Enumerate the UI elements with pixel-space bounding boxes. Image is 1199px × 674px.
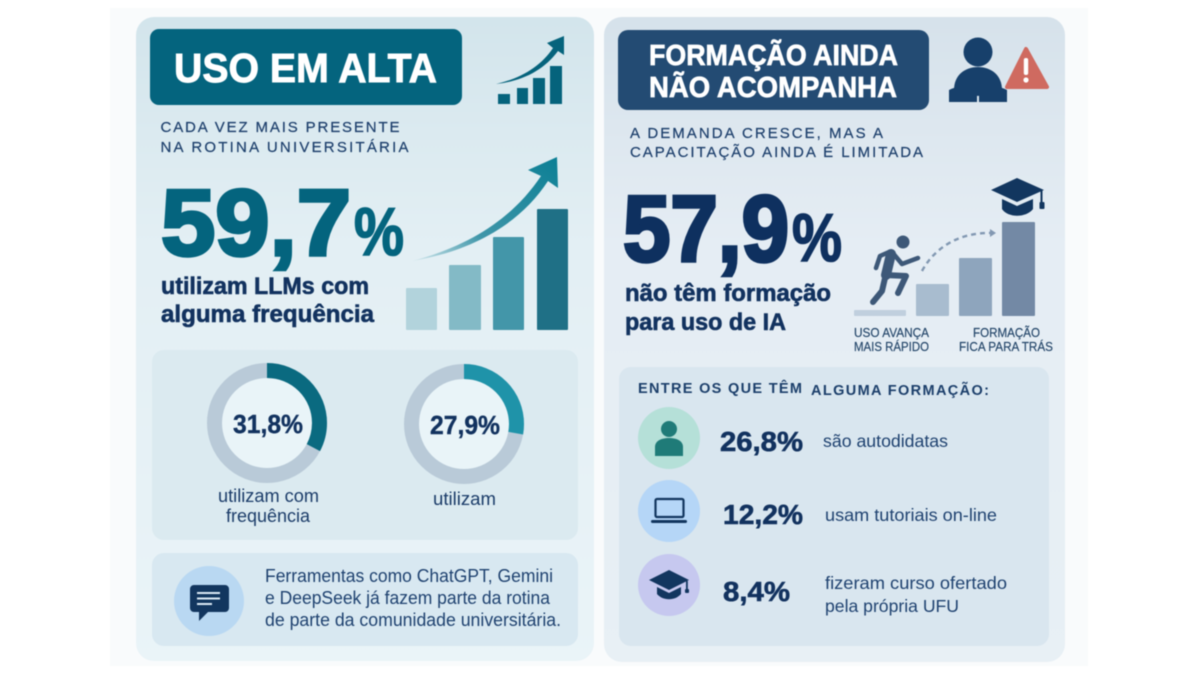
row: autodidatas: são autodidatas: [823, 431, 948, 451]
subtitle: [160, 119, 408, 156]
label: uso avança mais rápido: USO AVANÇA: [854, 326, 930, 340]
label: formação fica para trás: FICA PARA TRÁS: [959, 339, 1053, 354]
subtitle: NA ROTINA UNIVERSITÁRIA: [160, 139, 408, 156]
heading: formação: FORMAÇÃO AINDA: [649, 38, 898, 72]
icon: laptop: [638, 480, 700, 542]
donut: 27,9%: [412, 372, 516, 476]
donut: 31,8%: [214, 370, 320, 476]
donut label: utilizam: utilizam: [433, 489, 496, 509]
label: formação fica para trás: FORMAÇÃO: [973, 326, 1040, 340]
subtitle: A DEMANDA CRESCE, MAS A: [630, 125, 883, 142]
row: curso UFU: 8,4%: [723, 576, 790, 607]
heading: uso em alta: [150, 29, 462, 105]
icon: person: [638, 407, 700, 469]
arrow: growth: [412, 157, 558, 261]
stat description: [161, 273, 375, 328]
donut label: utilizam com frequência: frequência: [226, 506, 311, 526]
big stat: 57,9%: 57,9: [623, 176, 789, 281]
donut label: utilizam com frequência: utilizam com: [218, 486, 319, 506]
stat description: não têm formação: [625, 280, 831, 307]
panel: formação breakdown: [619, 367, 1049, 646]
stat description: [625, 280, 831, 336]
stat description: para uso de IA: [625, 309, 786, 336]
big stat: 57,9%: %: [792, 200, 842, 276]
row: curso UFU: [638, 554, 1007, 616]
icon: chat bubble: [174, 566, 244, 636]
label: uso avança mais rápido: MAIS RÁPIDO: [854, 339, 929, 354]
icon: runner: [873, 236, 918, 302]
heading: uso em alta: USO EM ALTA: [174, 45, 437, 91]
donut: 27,9%: 27,9%: [430, 410, 500, 440]
row: curso UFU: fizeram curso ofertado: [825, 573, 1007, 593]
icon: warning triangle: [1007, 49, 1047, 87]
row: curso UFU: pela própria UFU: [825, 596, 959, 616]
heading: formação: [618, 30, 929, 110]
subtitle: CAPACITAÇÃO AINDA É LIMITADA: [630, 144, 923, 161]
tools text: e DeepSeek já fazem parte da rotina: [265, 588, 551, 608]
row: autodidatas: [638, 407, 948, 469]
icon: cap: [638, 554, 700, 616]
icon: person reading: [949, 38, 1007, 102]
donut label: utilizam com frequência: [218, 486, 319, 526]
tools text: de parte da comunidade universitária.: [265, 610, 561, 630]
row: tutoriais: usam tutoriais on-line: [825, 505, 997, 525]
heading: formação: NÃO ACOMPANHA: [649, 70, 897, 104]
stat description: alguma frequência: [161, 301, 375, 328]
icon: small rising chart: [496, 36, 564, 104]
breakdown heading: ENTRE OS QUE TÊM: [638, 379, 802, 397]
breakdown heading: [638, 379, 989, 399]
panel: donuts: [152, 350, 578, 540]
tools text: [265, 566, 561, 630]
big stat: 59,7%: 59,7: [161, 170, 351, 275]
row: autodidatas: 26,8%: [720, 426, 803, 457]
panel: uso em alta: [136, 17, 594, 661]
label: uso avança mais rápido: [854, 326, 930, 354]
donut: 31,8%: 31,8%: [233, 409, 303, 439]
row: tutoriais: 12,2%: [723, 499, 803, 530]
stat description: utilizam LLMs com: [161, 273, 369, 300]
chart: step bars: [854, 222, 1035, 316]
panel: formação ainda não acompanha: [604, 17, 1065, 662]
arrow: dashed: [922, 229, 996, 271]
panel: tools note: [152, 553, 578, 646]
icon: graduation cap: [991, 178, 1044, 216]
bar chart: rising bars: [406, 209, 568, 330]
subtitle: CADA VEZ MAIS PRESENTE: [160, 119, 400, 136]
subtitle: [630, 125, 923, 161]
tools text: Ferramentas como ChatGPT, Gemini: [265, 566, 553, 586]
breakdown heading: ALGUMA FORMAÇÃO:: [811, 381, 989, 399]
row: tutoriais: [638, 480, 997, 542]
label: formação fica para trás: [959, 326, 1053, 354]
big stat: 59,7%: %: [354, 194, 404, 270]
